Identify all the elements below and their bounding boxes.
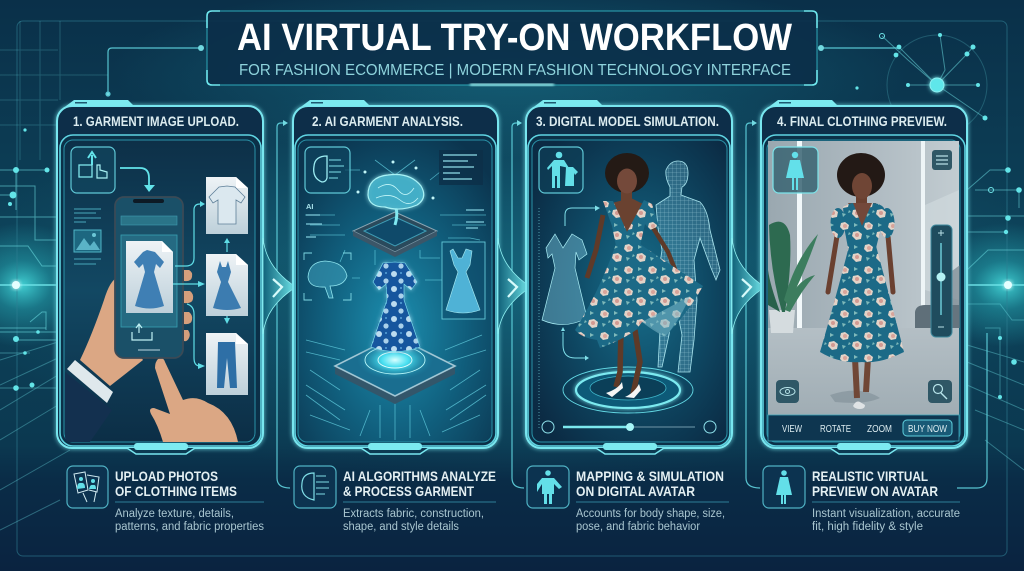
icon: tap to upload <box>71 147 115 193</box>
icon: brain <box>305 147 350 193</box>
model 3 <box>575 153 703 398</box>
caption 4 heading: PREVIEW ON AVATAR <box>812 483 938 499</box>
panel 3: digital model simulation <box>526 100 732 454</box>
file: shirt <box>206 177 248 234</box>
wireframe avatar <box>656 161 720 372</box>
brain hologram <box>356 160 434 225</box>
file: floral dress <box>206 254 248 316</box>
caption 1 heading: OF CLOTHING ITEMS <box>115 483 237 499</box>
bottom platform chip <box>335 336 455 404</box>
slider control <box>542 421 716 433</box>
subtitle: FOR FASHION ECOMMERCE | MODERN FASHION TECHNOLOGY INTERFACE <box>239 62 791 79</box>
right dress hologram box <box>442 242 485 319</box>
file: jeans <box>206 333 248 395</box>
panel 1: garment image upload <box>57 100 263 454</box>
flow arrow 1 to 2 <box>263 238 296 334</box>
bottom menu: BUY NOW <box>908 423 947 435</box>
title block <box>207 11 817 86</box>
icon: model and garment <box>539 147 583 193</box>
pointing hand <box>150 358 238 442</box>
left circuit decoration <box>0 21 108 530</box>
circuit traces <box>305 160 486 440</box>
panel 1 heading: 1. GARMENT IMAGE UPLOAD. <box>73 114 239 129</box>
panel 4 heading: 4. FINAL CLOTHING PREVIEW. <box>777 114 947 129</box>
caption 2 <box>294 466 496 533</box>
zoom slider <box>931 225 952 337</box>
bottom menu <box>768 415 959 441</box>
icon: avatar <box>763 466 805 508</box>
main title: AI VIRTUAL TRY-ON WORKFLOW <box>237 17 792 59</box>
right circuit and node network decoration <box>855 33 1024 470</box>
bottom menu: VIEW <box>782 423 802 435</box>
small AI labels <box>306 202 484 237</box>
caption 1 heading: UPLOAD PHOTOS <box>115 468 218 484</box>
phone <box>115 197 183 358</box>
caption 1 body: Analyze texture, details, <box>115 508 234 520</box>
link arrows <box>539 206 600 430</box>
magnifier button <box>928 380 952 403</box>
caption 2 body: shape, and style details <box>343 521 459 533</box>
caption 4 heading: REALISTIC VIRTUAL <box>812 468 928 484</box>
caption 3 heading: ON DIGITAL AVATAR <box>576 483 695 499</box>
glowing floral dress <box>371 262 420 352</box>
panel 3 heading: 3. DIGITAL MODEL SIMULATION. <box>536 114 719 129</box>
small image placeholder <box>74 209 101 264</box>
eye button <box>776 380 799 403</box>
flow arrow 3 to 4 <box>732 238 765 334</box>
caption 4 <box>763 466 960 533</box>
panel 4: final clothing preview <box>761 100 967 454</box>
caption 3 heading: MAPPING & SIMULATION <box>576 468 724 484</box>
caption 1 body: patterns, and fabric properties <box>115 521 264 533</box>
flow arrow 2 to 3 <box>498 238 531 334</box>
caption 4 body: fit, high fidelity & style <box>812 521 923 533</box>
caption 2 body: Extracts fabric, construction, <box>343 508 484 520</box>
icon: dress figure <box>773 147 818 193</box>
text readout box <box>439 150 483 185</box>
caption 1 <box>67 466 264 533</box>
holding hand and sleeve <box>65 270 193 442</box>
caption 4 body: Instant visualization, accurate <box>812 508 960 520</box>
showroom photo <box>768 141 960 415</box>
caption 3 body: Accounts for body shape, size, <box>576 508 725 520</box>
menu button <box>932 150 952 170</box>
bottom menu: ZOOM <box>867 423 892 435</box>
panel 2 heading: 2. AI GARMENT ANALYSIS. <box>312 114 463 129</box>
caption 3 <box>527 466 729 533</box>
caption 2 heading: & PROCESS GARMENT <box>343 483 474 499</box>
icon: brain circuit <box>294 466 336 508</box>
hologram dress <box>542 234 587 325</box>
platform <box>563 367 693 413</box>
panel 2: ai garment analysis <box>293 100 498 454</box>
icon: photos <box>67 466 108 508</box>
connector lines between panels and captions <box>106 45 987 488</box>
icon: mapping figure <box>527 466 569 508</box>
plant <box>768 222 818 333</box>
top chip <box>353 212 437 257</box>
arrow: to phone <box>120 168 155 192</box>
small AI labels: AI <box>306 202 314 211</box>
bottom menu: ROTATE <box>820 423 851 435</box>
left brain scan box <box>304 253 351 300</box>
arrows to garment files <box>173 201 230 369</box>
caption 2 heading: AI ALGORITHMS ANALYZE <box>343 468 496 484</box>
caption 3 body: pose, and fabric behavior <box>576 521 700 533</box>
dress thumbnail <box>134 250 164 308</box>
model 4 <box>820 153 904 409</box>
